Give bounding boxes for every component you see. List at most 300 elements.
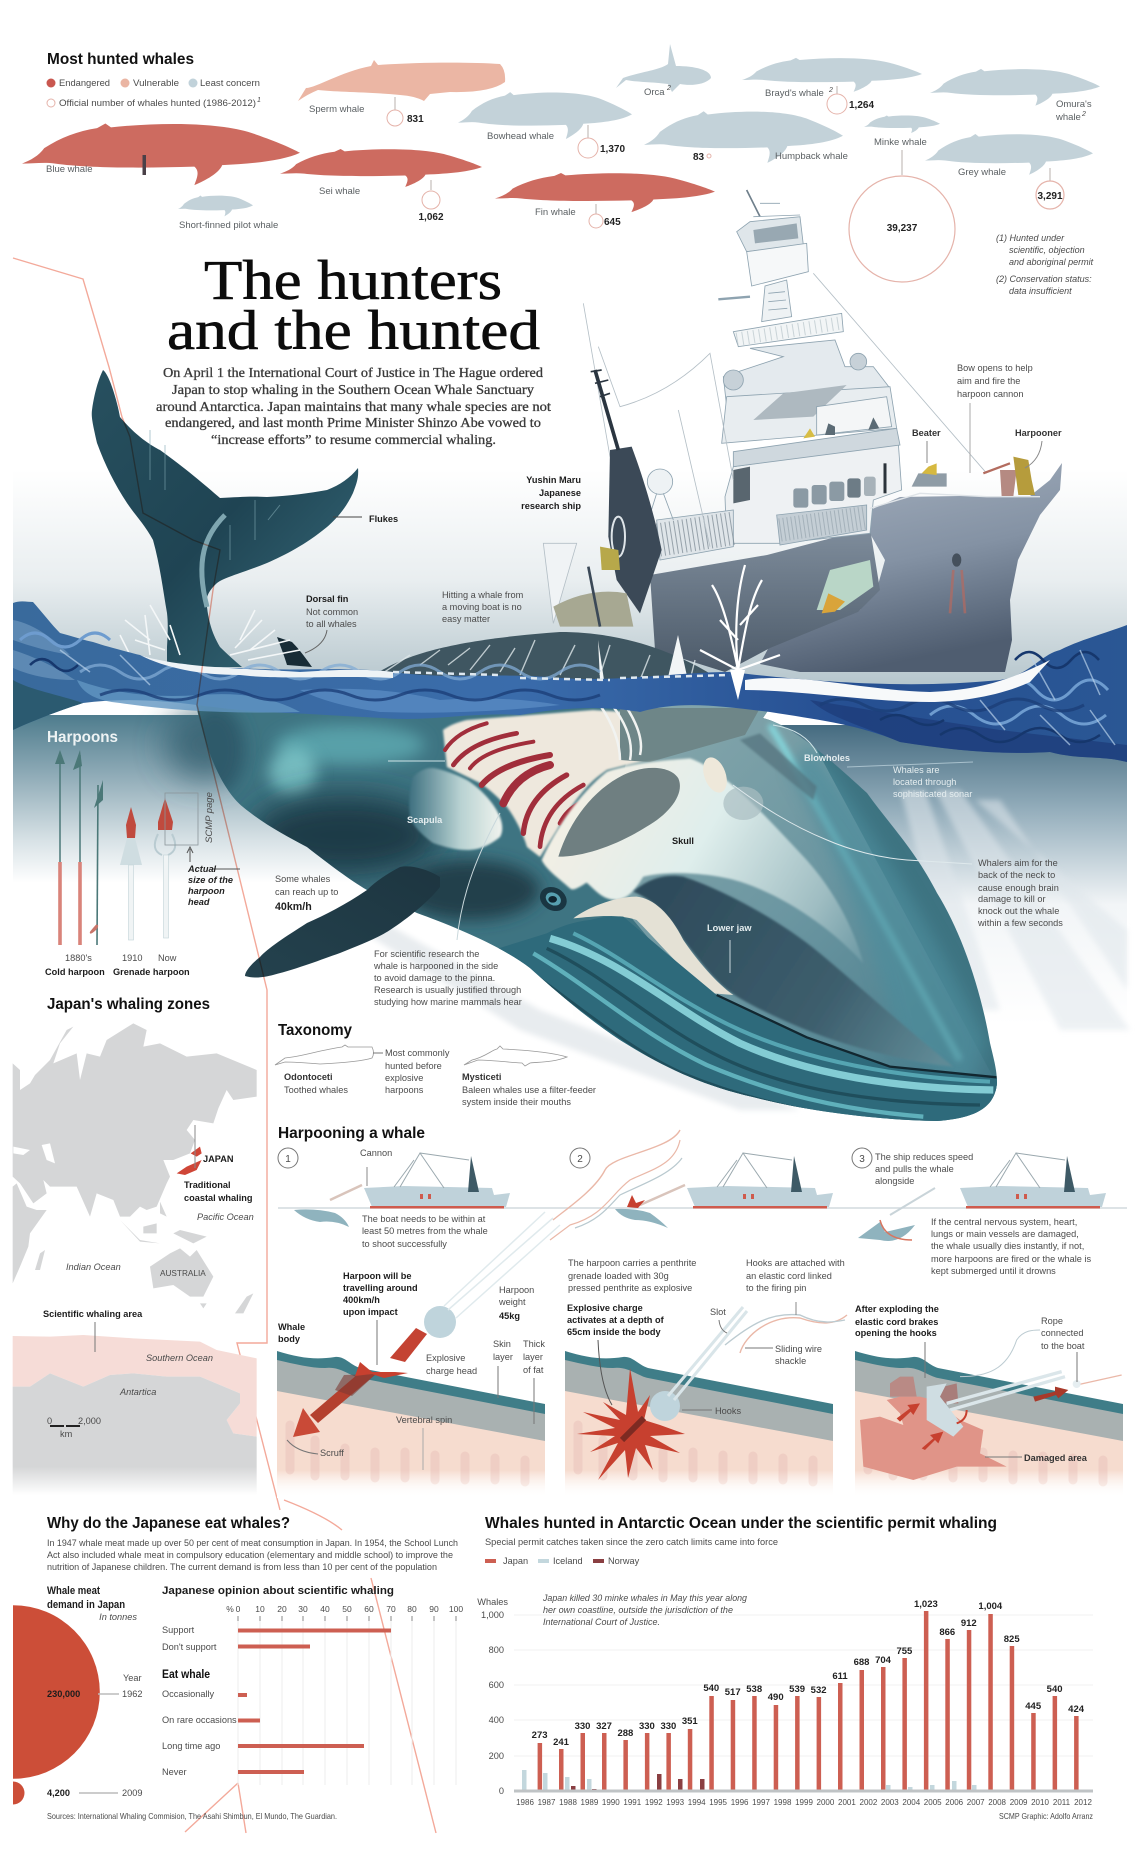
pink outline of Japan map motif <box>13 258 436 1833</box>
panel 1: harpoon entering: Vertebral spin <box>396 1415 452 1425</box>
bar chart: 327 <box>596 1721 612 1732</box>
ship: rigging lines <box>543 273 987 623</box>
section: whales hunted in Antarctic Ocean <box>477 1515 1093 1821</box>
section: harpooning a whale <box>277 1125 1127 1498</box>
panel 3: hooks open: Rope <box>1041 1316 1063 1326</box>
chart: whale meat demand: Year <box>123 1673 142 1683</box>
callouts: whale anatomy: studying how marine mammals hear <box>374 997 522 1007</box>
bar chart: 241 <box>553 1737 570 1748</box>
intro paragraph: Japan to stop whaling in the Southern Ocean Whale Sanctuary <box>172 382 534 397</box>
bar chart: 1992 <box>645 1798 663 1807</box>
callouts: upper illustration: Flukes <box>369 514 398 524</box>
heading: Why do the Japanese eat whales? <box>47 1515 290 1532</box>
head plate <box>616 705 997 1091</box>
footnotes: and aboriginal permit <box>1009 257 1094 267</box>
ship: mid hull <box>650 528 880 672</box>
map scale: km <box>60 1429 72 1439</box>
ocean surface waves <box>13 601 1127 762</box>
callouts: whale anatomy: For scientific research the <box>374 949 479 959</box>
skull <box>498 733 997 1121</box>
bar chart: 2009 <box>1010 1798 1028 1807</box>
footnotes: (1) Hunted under <box>996 233 1065 243</box>
bar chart: 1999 <box>795 1798 813 1807</box>
paragraph: In 1947 whale meat made up over 50 per cent of meat consumption in Japan. In 1954, the School Lunch <box>47 1538 458 1549</box>
callouts: whale anatomy: within a few seconds <box>977 918 1063 928</box>
step 2 <box>550 1140 833 1240</box>
panel 1: harpoon entering: Harpoon will be <box>343 1271 412 1281</box>
callouts: whale anatomy: Whales are <box>893 765 940 775</box>
bar chart: 704 <box>875 1655 892 1666</box>
chart: whale meat demand: Whale meat <box>47 1585 101 1597</box>
whale: grey whale: 3,291 <box>1037 191 1063 202</box>
section heading: most hunted whales: Most hunted whales <box>47 51 194 68</box>
callouts: whale anatomy: located through <box>893 777 956 787</box>
paragraph <box>47 1538 458 1573</box>
panel 1: harpoon entering: Skin <box>493 1339 511 1349</box>
bar chart: 200 <box>489 1751 504 1761</box>
bar chart: 1,000 <box>481 1610 504 1620</box>
whale: sperm whale <box>298 60 505 126</box>
callouts: whale anatomy: Whalers aim for the <box>978 858 1058 868</box>
section: why do the Japanese eat whales <box>13 1515 463 1821</box>
panel 1: harpoon entering: Whale <box>278 1322 305 1332</box>
bar chart: 540 <box>703 1683 719 1694</box>
step 3: If the central nervous system, heart, <box>931 1217 1077 1227</box>
footnotes: data insufficient <box>1009 286 1072 296</box>
panel 2: explosive charge: pressed penthrite as explosive <box>568 1283 692 1293</box>
panel: harpoons: Now <box>158 953 177 963</box>
bar chart: 330 <box>639 1721 655 1732</box>
section: taxonomy: hunted before <box>385 1061 442 1071</box>
panel: harpoons: 1880's <box>65 953 92 963</box>
panel 2: explosive charge: Sliding wire <box>775 1344 822 1354</box>
bar chart: 424 <box>1068 1704 1085 1715</box>
callouts: whale anatomy: sophisticated sonar <box>893 789 972 799</box>
step 3: more harpoons are fired or the whale is <box>931 1254 1091 1264</box>
intro paragraph: On April 1 the International Court of Justice in The Hague ordered <box>163 365 543 380</box>
bar chart: 1986 <box>516 1798 534 1807</box>
main title: and the hunted <box>167 300 540 362</box>
callouts: whale anatomy: cause enough brain <box>978 883 1059 893</box>
section: taxonomy: Odontoceti <box>284 1072 333 1082</box>
bar chart: 2004 <box>902 1798 921 1807</box>
whale: grey whale: Grey whale <box>958 167 1006 178</box>
bar chart: 445 <box>1025 1701 1042 1712</box>
whale: omura's whale: 2 <box>1081 111 1086 118</box>
whale: humpback whale: 83 <box>693 152 705 163</box>
chart: Japanese opinion bars: Never <box>162 1767 187 1777</box>
legend: conservation status: Official number of whales hunted (1986-2012) <box>59 98 256 109</box>
chart: Japanese opinion bars: 40 <box>320 1604 330 1614</box>
bar chart: 600 <box>489 1680 504 1690</box>
scapula <box>409 768 502 850</box>
panel: map of whaling zones: AUSTRALIA <box>160 1268 206 1278</box>
chart: Japanese opinion bars: 70 <box>386 1604 396 1614</box>
map scale: 0 <box>47 1416 52 1426</box>
paragraph: Act also included whale meat in compulsory education (elementary and middle school) to improve the <box>47 1550 453 1561</box>
bar chart: 1,023 <box>914 1599 938 1610</box>
whale: short-finned pilot whale <box>178 196 278 231</box>
panel: map of whaling zones: JAPAN <box>203 1154 234 1164</box>
whale: humpback whale: Humpback whale <box>775 151 848 162</box>
panel 1: harpoon entering: Harpoon <box>499 1285 534 1295</box>
bar chart: 2001 <box>838 1798 856 1807</box>
ship: superstructure <box>647 190 902 560</box>
chart: Japanese opinion bars: 80 <box>407 1604 417 1614</box>
whale: bowhead whale <box>458 92 632 158</box>
bar chart: 755 <box>896 1646 913 1657</box>
panel 1: harpoon entering: layer <box>493 1352 513 1362</box>
whale flipper <box>245 866 440 978</box>
paragraph: nutrition of Japanese children. The current demand is from less than 10 per cent of the population <box>47 1562 437 1573</box>
whale: fin whale: 645 <box>604 217 621 228</box>
panel 2: explosive charge: to the firing pin <box>746 1283 806 1293</box>
section: taxonomy: Baleen whales use a filter-feeder <box>462 1085 596 1095</box>
chart: Japanese opinion bars: 20 <box>277 1604 287 1614</box>
bar chart: 2011 <box>1053 1798 1071 1807</box>
bar chart: 540 <box>1047 1684 1063 1695</box>
step 1: least 50 metres from the whale <box>362 1226 488 1236</box>
map scale <box>47 1416 101 1439</box>
section: taxonomy: explosive <box>385 1073 423 1083</box>
step 1: Cannon <box>360 1148 392 1158</box>
bar chart: 2005 <box>924 1798 942 1807</box>
bar chart: 400 <box>489 1715 504 1725</box>
callouts: upper illustration: research ship <box>521 501 581 511</box>
bar chart: 2000 <box>817 1798 835 1807</box>
callouts: upper illustration: to all whales <box>306 619 357 629</box>
map scale: 2,000 <box>78 1416 101 1426</box>
whale: orca: 2 <box>666 85 671 92</box>
whale: orca <box>616 44 711 98</box>
foam <box>745 660 1050 702</box>
bar chart: 0 <box>499 1786 504 1796</box>
callouts: whale anatomy: Some whales <box>275 874 331 884</box>
chart: Japanese opinion bars: Eat whale <box>162 1668 210 1681</box>
step 2: 2 <box>577 1154 583 1165</box>
panel: harpoons: Actual <box>187 864 217 874</box>
map land shapes <box>13 1023 257 1495</box>
chart: Japanese opinion bars: 100 <box>449 1604 463 1614</box>
chart: Japanese opinion bars: 50 <box>342 1604 352 1614</box>
chart: whale meat demand: In tonnes <box>99 1612 137 1622</box>
bar chart: 825 <box>1004 1634 1020 1645</box>
callouts: whale anatomy: Scapula <box>407 815 443 825</box>
ship: bow hull <box>760 463 1062 672</box>
panel 1: harpoon entering: travelling around <box>343 1283 418 1293</box>
panel: harpoons: SCMP page <box>204 792 215 843</box>
whale: bryde's whale: Brayd's whale <box>765 88 824 99</box>
whale: humpback whale <box>644 111 848 163</box>
panel: harpoons: harpoon <box>188 886 225 896</box>
whale: minke whale: Minke whale <box>874 137 927 148</box>
chart: Japanese opinion bars: % <box>226 1604 234 1614</box>
panel 3: hooks open <box>855 1304 1123 1498</box>
whale: sei whale: Sei whale <box>319 186 360 197</box>
section: taxonomy: harpoons <box>385 1085 424 1095</box>
eye <box>540 887 567 911</box>
legend: conservation status: Least concern <box>200 78 260 89</box>
bar chart: 2012 <box>1074 1798 1092 1807</box>
bar chart: 532 <box>811 1685 827 1696</box>
main title <box>167 250 540 362</box>
bar chart: 1990 <box>602 1798 620 1807</box>
chart: Japanese opinion bars: 10 <box>255 1604 265 1614</box>
bar chart: 330 <box>660 1721 676 1732</box>
whale body with clip <box>196 705 997 1121</box>
panel: harpoons: 1910 <box>122 953 142 963</box>
callouts: upper illustration: Japanese <box>539 488 581 498</box>
panel 2: explosive charge: 65cm inside the body <box>567 1327 661 1337</box>
callouts: upper illustration: Harpooner <box>1015 428 1062 438</box>
panel: harpoons: Cold harpoon <box>45 967 105 977</box>
panel 1: harpoon entering: body <box>278 1334 301 1344</box>
panel 1: harpoon entering: upon impact <box>343 1307 398 1317</box>
chart: whale meat demand: 1962 <box>122 1689 142 1699</box>
panel 1: harpoon entering: Explosive <box>426 1353 465 1363</box>
heading: harpooning a whale: Harpooning a whale <box>278 1125 425 1142</box>
whale: omura's whale <box>930 69 1100 123</box>
main title: The hunters <box>204 250 502 312</box>
panel 2: explosive charge: Hooks <box>715 1406 741 1416</box>
throat pleats <box>498 916 997 1121</box>
callouts: whale anatomy: Skull <box>672 836 694 846</box>
ribs <box>443 705 760 857</box>
panel: map of whaling zones <box>13 1023 257 1495</box>
splash around tail <box>120 605 300 660</box>
whale: bowhead whale: Bowhead whale <box>487 131 554 142</box>
whale: sperm whale: 831 <box>407 114 424 125</box>
chart: Japanese opinion bars <box>162 1585 463 1785</box>
bar chart: 1987 <box>538 1798 556 1807</box>
panel 3: hooks open: opening the hooks <box>855 1328 937 1338</box>
icon: cold harpoons <box>55 750 103 945</box>
callouts: whale anatomy: 40km/h <box>275 901 312 913</box>
mouth interior <box>633 876 953 1067</box>
whale: short-finned pilot whale: Short-finned pilot whale <box>179 220 278 231</box>
subtitle: Special permit catches taken since the zero catch limits came into force <box>485 1537 778 1548</box>
bar chart: 539 <box>789 1684 805 1695</box>
bar chart: 1989 <box>581 1798 599 1807</box>
chart: Japanese opinion bars: 60 <box>364 1604 374 1614</box>
bar chart: 490 <box>768 1692 784 1703</box>
panel 1: harpoon entering: 400km/h <box>343 1295 380 1305</box>
bar chart: Whales <box>477 1597 508 1607</box>
step 1: to shoot successfully <box>362 1239 447 1249</box>
panel: map of whaling zones: Pacific Ocean <box>197 1212 254 1222</box>
illustration backdrop: fog and underwater gradients <box>13 470 1130 1110</box>
bar chart: 1997 <box>752 1798 770 1807</box>
legend: Iceland <box>553 1556 583 1566</box>
whale silhouettes chart <box>22 44 1100 282</box>
whale: bowhead whale: 1,370 <box>600 144 625 155</box>
icon: odontoceti outline <box>275 1045 374 1065</box>
panel 2: explosive charge: shackle <box>775 1356 806 1366</box>
step 1: 1 <box>285 1154 291 1165</box>
whale: minke whale <box>849 115 955 282</box>
panel: harpoons <box>45 729 240 977</box>
panel: map of whaling zones: Antartica <box>119 1387 156 1397</box>
chart: Japanese opinion bars: Occasionally <box>162 1689 214 1699</box>
whale: minke whale: 39,237 <box>887 223 918 234</box>
panel 1: harpoon entering: charge head <box>426 1366 477 1376</box>
panel: map of whaling zones: Indian Ocean <box>66 1262 121 1272</box>
section: taxonomy: system inside their mouths <box>462 1097 571 1107</box>
footnotes <box>996 233 1094 296</box>
section: taxonomy <box>275 1022 596 1107</box>
whale: blue whale: Blue whale <box>46 164 92 175</box>
panel 3: hooks open: Damaged area <box>1024 1453 1088 1463</box>
step 3: alongside <box>875 1176 914 1186</box>
legend: conservation status: 1 <box>257 97 261 104</box>
step 3: and pulls the whale <box>875 1164 954 1174</box>
chart: whale meat demand: 4,200 <box>47 1788 70 1798</box>
legend: conservation status <box>46 78 261 109</box>
bar chart: 1998 <box>774 1798 792 1807</box>
panel 1: harpoon entering: 45kg <box>499 1311 520 1321</box>
whale: sei whale: 1,062 <box>418 212 444 223</box>
callouts: upper illustration: Bow opens to help <box>957 363 1033 373</box>
intro paragraph: endangered, and last month Prime Minister Shinzo Abe vowed to <box>165 415 541 430</box>
whale: orca: Orca <box>644 87 665 98</box>
bar chart: 288 <box>617 1728 633 1739</box>
anatomical whale underwater <box>196 705 997 1121</box>
intro paragraph: “increase efforts” to resume commercial whaling. <box>211 432 496 447</box>
whale back above water <box>367 632 735 690</box>
annotation: International Court of Justice. <box>543 1617 660 1628</box>
legend: Japan <box>503 1556 528 1566</box>
step 1 <box>278 1148 510 1249</box>
chart: Japanese opinion bars: Support <box>162 1625 195 1635</box>
whale: sperm whale: Sperm whale <box>309 104 364 115</box>
legend: conservation status: Endangered <box>59 78 110 89</box>
step 3: The ship reduces speed <box>875 1152 973 1162</box>
legend: conservation status: Vulnerable <box>133 78 179 89</box>
callouts: whale anatomy: damage to kill or <box>978 894 1046 904</box>
dorsal fin <box>277 637 312 667</box>
bar chart: 1991 <box>623 1798 642 1807</box>
chart: Japanese opinion bars: On rare occasions <box>162 1715 237 1725</box>
whale: bryde's whale: 1,264 <box>849 100 874 111</box>
callouts: upper illustration: harpoon cannon <box>957 389 1024 399</box>
bar chart <box>477 1593 1093 1807</box>
callouts: upper illustration: Hitting a whale from <box>442 590 524 600</box>
icon: grenade harpoons <box>120 793 198 940</box>
chart: whale meat demand: demand in Japan <box>47 1599 125 1611</box>
callouts: upper illustration: Yushin Maru <box>526 475 581 485</box>
legend <box>485 1556 640 1566</box>
panel 2: explosive charge: grenade loaded with 30g <box>568 1271 669 1281</box>
bar chart: 2007 <box>967 1798 985 1807</box>
bar chart: 1994 <box>688 1798 706 1807</box>
bar chart: 2003 <box>881 1798 899 1807</box>
chart: Japanese opinion bars: 0 <box>236 1604 241 1614</box>
lower jaw bone <box>573 897 733 995</box>
bar chart: 517 <box>725 1687 741 1698</box>
panel: map of whaling zones: Traditional <box>184 1180 231 1190</box>
chart: whale meat demand: 2009 <box>122 1788 142 1798</box>
step 3: 3 <box>859 1154 865 1165</box>
whale: fin whale <box>495 173 715 228</box>
section: taxonomy: Toothed whales <box>284 1085 348 1095</box>
whale: bryde's whale: 2 <box>828 87 833 94</box>
chart: whale meat demand: 230,000 <box>47 1689 80 1699</box>
intro paragraph: around Antarctica. Japan maintains that many whale species are not <box>156 399 551 414</box>
footnotes: scientific, objection <box>1009 245 1085 255</box>
heading: harpoons: Harpoons <box>47 729 118 746</box>
section: taxonomy: Taxonomy <box>278 1022 352 1039</box>
step 1: The boat needs to be within at <box>362 1214 486 1224</box>
panel 3: hooks open: After exploding the <box>855 1304 939 1314</box>
bar chart: 2008 <box>988 1798 1007 1807</box>
panel: map of whaling zones: Southern Ocean <box>146 1353 213 1363</box>
whale: bryde's whale <box>742 58 922 114</box>
chart: Japanese opinion bars: Long time ago <box>162 1741 220 1751</box>
footnotes: (2) Conservation status: <box>996 274 1092 284</box>
chart: Japanese opinion bars: Japanese opinion about scientific whaling <box>162 1585 394 1597</box>
ship: water spout <box>700 565 780 670</box>
bar chart: 2006 <box>945 1798 964 1807</box>
callouts: upper illustration: easy matter <box>442 614 490 624</box>
bar chart: 611 <box>832 1671 848 1682</box>
step 3: lungs or main vessels are damaged, <box>931 1229 1079 1239</box>
panel 3: hooks open: elastic cord brakes <box>855 1317 938 1327</box>
heading: Whales hunted in Antarctic Ocean under the scientific permit whaling <box>485 1515 997 1532</box>
annotation <box>542 1593 748 1628</box>
chart: Japanese opinion bars: 30 <box>298 1604 308 1614</box>
panel 2: explosive charge <box>565 1258 847 1498</box>
bar chart: 800 <box>489 1645 504 1655</box>
callouts: upper illustration: Not common <box>306 607 358 617</box>
whale: sei whale <box>280 149 482 223</box>
panel 1: harpoon entering: of fat <box>523 1365 544 1375</box>
callouts: upper illustration: Dorsal fin <box>306 594 349 604</box>
legend: Norway <box>608 1556 640 1566</box>
section: taxonomy: Mysticeti <box>462 1072 501 1082</box>
panel 1: harpoon entering <box>277 1130 680 1498</box>
callouts: upper illustration <box>305 363 1062 653</box>
bar chart: 1,004 <box>978 1601 1003 1612</box>
callouts: whale anatomy: whale is harpooned in the side <box>373 961 498 971</box>
callouts: whale anatomy: back of the neck to <box>978 870 1055 880</box>
panel 2: explosive charge: activates at a depth of <box>567 1315 665 1325</box>
intro paragraph <box>156 365 551 447</box>
chart: whale meat demand <box>13 1585 142 1804</box>
chart: Japanese opinion bars: 90 <box>429 1604 439 1614</box>
bar chart: 351 <box>682 1716 698 1727</box>
bar chart: 330 <box>575 1721 590 1732</box>
whale: omura's whale: whale <box>1055 112 1081 123</box>
ship: dark stern tower and mast <box>553 370 662 627</box>
panel 1: harpoon entering: layer <box>523 1352 543 1362</box>
callouts: upper illustration: aim and fire the <box>957 376 1020 386</box>
bar chart: 2010 <box>1031 1798 1049 1807</box>
callouts: whale anatomy: to avoid damage to the pinna. <box>374 973 495 983</box>
panel 2: explosive charge: Explosive charge <box>567 1303 643 1313</box>
bar chart: 1996 <box>731 1798 749 1807</box>
panel: harpoons: head <box>188 897 210 907</box>
callouts: whale anatomy <box>275 725 1063 1007</box>
callouts: whale anatomy: knock out the whale <box>978 906 1059 916</box>
annotation: Japan killed 30 minke whales in May this year along <box>542 1593 748 1604</box>
callouts: whale anatomy: Research is usually justified through <box>374 985 521 995</box>
whale: blue whale <box>22 124 300 185</box>
panel: map of whaling zones: coastal whaling <box>184 1193 253 1203</box>
bar chart: 1993 <box>666 1798 685 1807</box>
ship: crew and green tarp <box>817 457 1040 613</box>
callouts: whale anatomy: Blowholes <box>804 753 850 763</box>
whale: fin whale: Fin whale <box>535 207 576 218</box>
